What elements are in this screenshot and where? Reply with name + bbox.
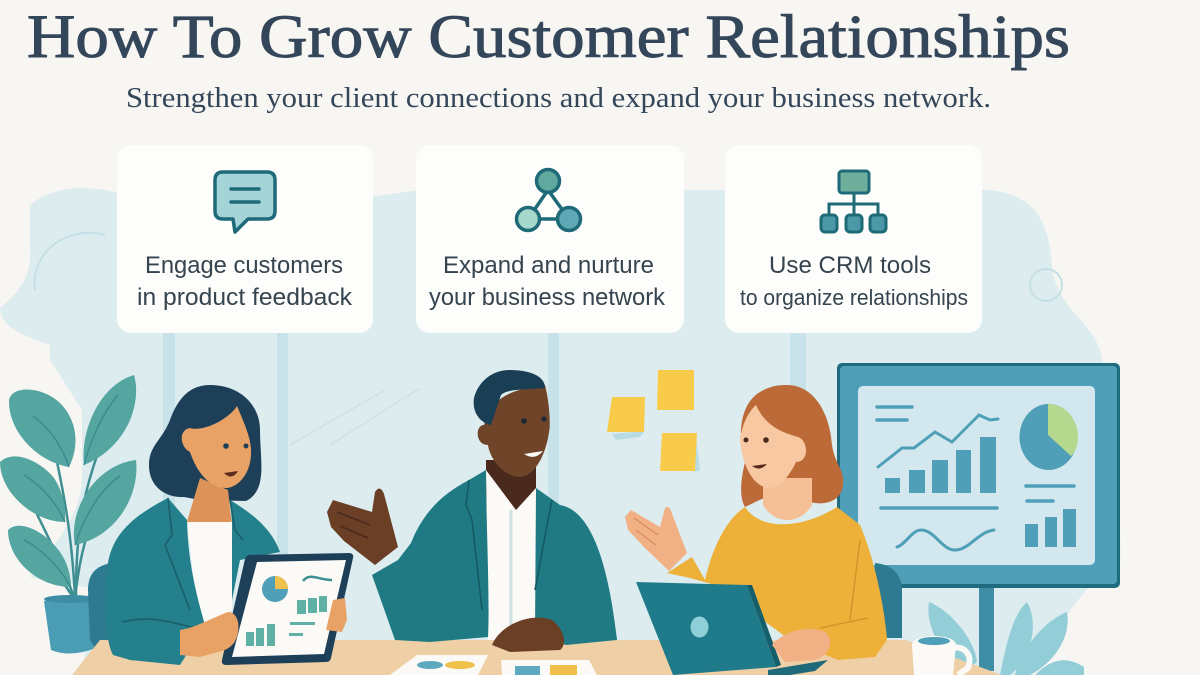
person: left woman with tablet [105, 385, 353, 665]
text: engage customers: in product feedback [137, 284, 353, 311]
shirt [187, 522, 232, 635]
title: How To Grow Customer Relationships [27, 4, 1070, 71]
papers on table [390, 655, 597, 675]
shirt [486, 470, 536, 640]
icon: speech bubble [215, 172, 275, 232]
text: CRM tools: Use CRM tools [769, 252, 931, 279]
person: centre man [327, 370, 617, 652]
subtitle: Strengthen your client connections and expand your business network. [126, 82, 991, 114]
sweater [667, 507, 887, 660]
tablet [222, 553, 353, 665]
coffee mug [912, 636, 969, 675]
plant: left [0, 375, 136, 654]
text: expand network [429, 252, 666, 311]
laptop [636, 582, 776, 675]
face [182, 406, 251, 488]
face [478, 385, 550, 477]
icon: org chart [821, 171, 886, 232]
neck [763, 478, 812, 520]
monitor with charts [837, 363, 1120, 671]
hand on table [492, 618, 564, 652]
text: expand network: Expand and nurture [443, 252, 654, 279]
text: expand network: your business network [429, 284, 666, 311]
chair: left [88, 563, 113, 655]
raised hand [327, 488, 398, 565]
hands [180, 612, 239, 657]
hand on laptop [772, 629, 830, 662]
jacket [105, 498, 205, 665]
panel: expand network [416, 145, 684, 333]
text: engage customers: Engage customers [145, 252, 343, 279]
panel: CRM tools [725, 145, 982, 333]
table [72, 640, 1002, 675]
jacket [372, 470, 489, 642]
text: CRM tools: to organize relationships [740, 285, 968, 310]
sticky notes [607, 370, 700, 472]
text: CRM tools [740, 252, 968, 310]
person: right woman with laptop [625, 385, 887, 675]
hair [149, 385, 261, 501]
hand raised [625, 507, 687, 571]
text: engage customers [137, 252, 353, 311]
icon: network nodes [516, 170, 580, 230]
plant: right [928, 602, 1084, 675]
hair [741, 385, 843, 507]
plant pot [44, 597, 96, 654]
chair: right [875, 563, 902, 638]
neck [486, 460, 536, 515]
panel: engage customers [117, 145, 373, 333]
neck [186, 478, 232, 525]
face [740, 405, 806, 488]
background: light blue office wall blob [0, 188, 1120, 675]
